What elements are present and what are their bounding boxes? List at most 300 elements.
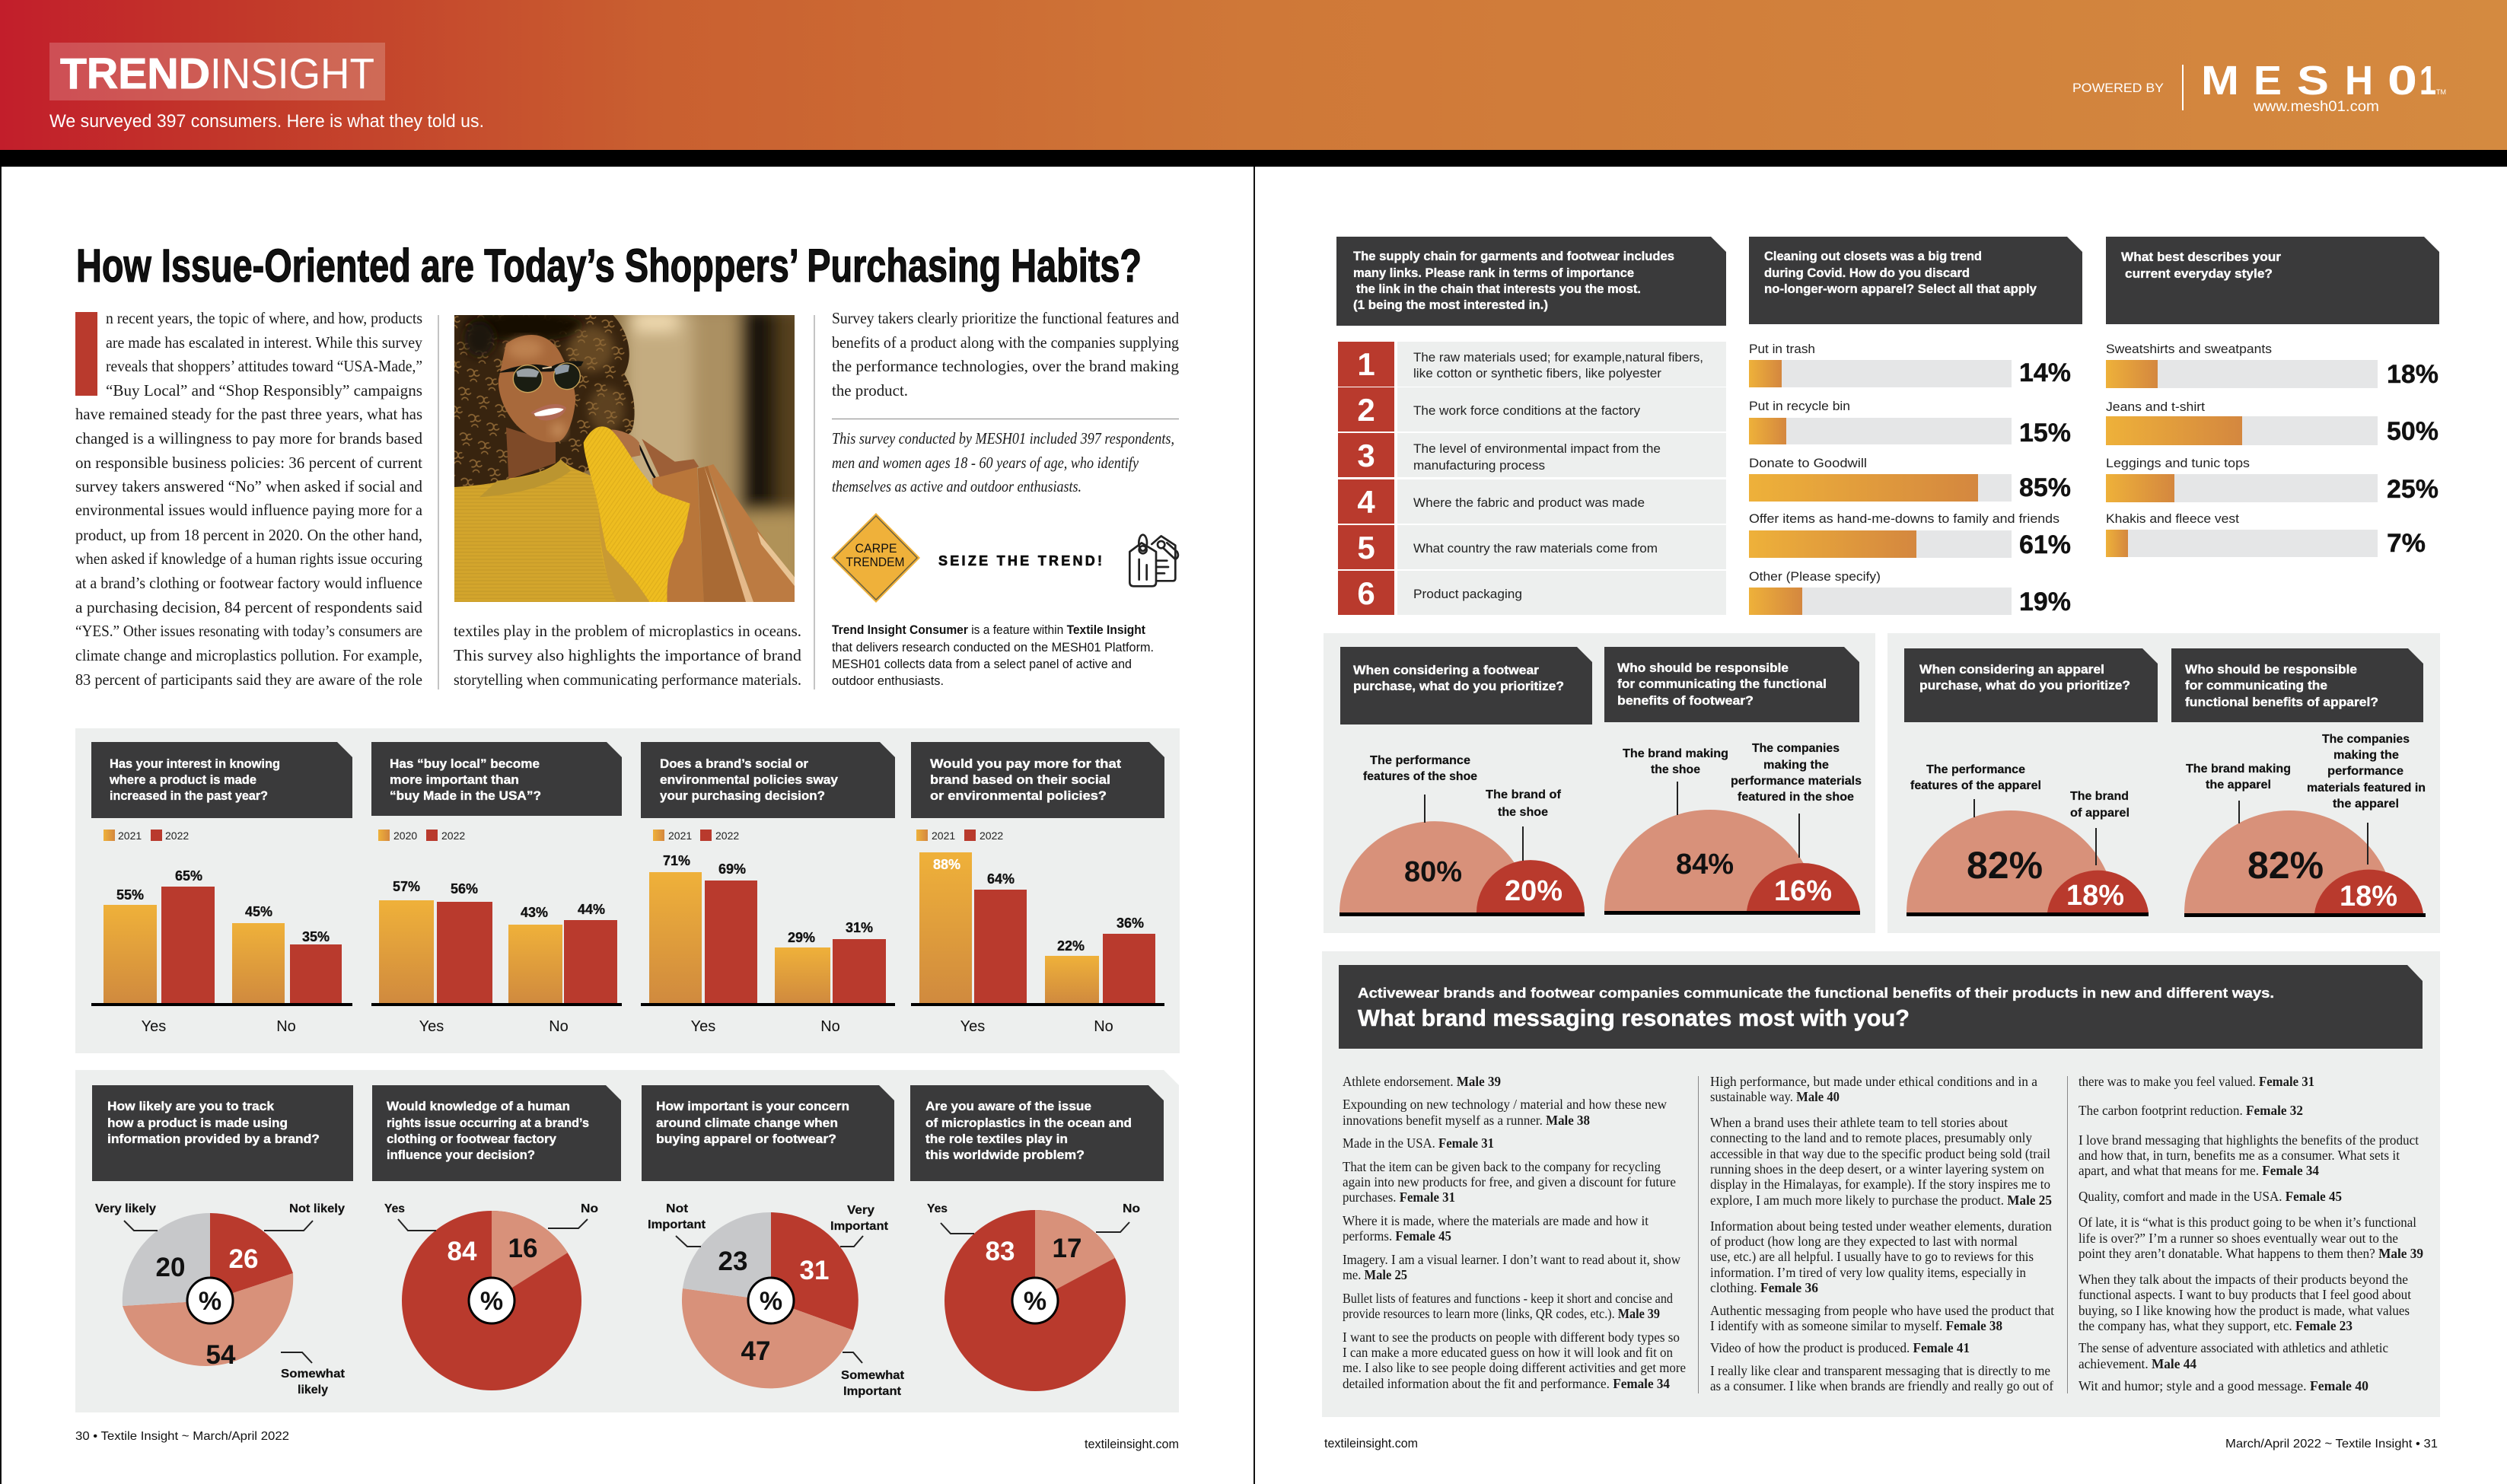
panel: supply chain ranking [1336, 237, 1726, 615]
chart: social or environmental policies: 29% [788, 930, 815, 945]
pie chart: human rights issue: influence your decision? [387, 1148, 535, 1162]
chart: social or environmental policies: 2021 [668, 830, 692, 842]
Trend Insight Consumer note: Trend Insight Consumer is a feature within Textile Insight [832, 623, 1145, 637]
chart: buy local: more important than [390, 772, 519, 787]
icon: Carpe Trendem road sign [831, 513, 920, 603]
comments column 1: innovations benefit myself as a runner. Male 38 [1343, 1113, 1590, 1128]
rank 4: Where the fabric and product was made [1413, 496, 1645, 510]
footer right: March/April 2022 ~ Textile Insight • 31 [2225, 1438, 2438, 1451]
chart: apparel purchase: purchase, what do you prioritize? [1919, 678, 2130, 693]
comments column 3: buying, so I like knowing how the product is made, what values [2079, 1303, 2410, 1318]
pie chart: microplastics awareness: % [1024, 1287, 1046, 1316]
article column 1: when asked if knowledge of a human rights issue occuring [75, 549, 422, 568]
chart: responsibility apparel: The companies [2322, 733, 2410, 746]
survey note [832, 429, 1174, 495]
chart: responsibility footwear: the shoe [1651, 763, 1700, 776]
comments column 1 [1343, 1074, 1686, 1391]
article column 2 continuation: storytelling when communicating performance materials. [454, 670, 801, 689]
article column 1: on responsible business policies: 36 percent of current [75, 454, 422, 472]
pie chart: microplastics awareness: 17 [1053, 1234, 1081, 1263]
messaging heading: Activewear brands and footwear companies communicate the functional benefits of their products in new and different ways. [1358, 986, 2274, 1001]
comments column 2: sustainable way. Male 40 [1710, 1089, 1840, 1104]
rank 5 [1338, 525, 1726, 569]
rank 4: 4 [1357, 484, 1375, 520]
panel: everyday style: 25% [2387, 475, 2439, 504]
comments column 1: again into new products for free, and given a discount for future [1343, 1174, 1676, 1189]
chart: interest in knowing where made: 45% [245, 904, 272, 919]
article column 3: the performance technologies, over the brand making [832, 357, 1180, 375]
chart: apparel purchase: When considering an apparel [1919, 662, 2104, 677]
rank 2: 2 [1357, 392, 1375, 428]
comments column 3: functional aspects. I want to buy products that I feel good about [2079, 1287, 2411, 1302]
panel: everyday style: 7% [2387, 529, 2426, 558]
comments column 2: as a consumer. I like when brands are friendly and really go out of [1710, 1378, 2053, 1393]
pie chart: climate change concern: Not [666, 1202, 688, 1215]
pie chart: track product: 20 [156, 1253, 185, 1282]
comments column 2: explore, I am much more likely to purchase the product. Male 25 [1710, 1193, 2052, 1208]
article column 3: the product. [832, 381, 908, 400]
article column 3: Survey takers clearly prioritize the functional features and [832, 309, 1179, 327]
pie chart: track product: 54 [206, 1340, 236, 1370]
chart: responsibility footwear: The brand making [1623, 747, 1728, 760]
comments column 3: The sense of adventure associated with athletics and athletic [2079, 1340, 2388, 1355]
rank 1: 1 [1357, 346, 1375, 382]
comments column 3: there was to make you feel valued. Female 31 [2079, 1074, 2314, 1089]
article column 1: climate change and microplastics pollution. For example, [75, 646, 422, 664]
comments column 3: The carbon footprint reduction. Female 32 [2079, 1103, 2303, 1118]
chart: apparel purchase: of apparel [2070, 807, 2130, 820]
chart: apparel purchase [1904, 648, 2158, 916]
chart: social or environmental policies [641, 742, 895, 1035]
chart: buy local: “buy Made in the USA”? [390, 788, 541, 803]
article column 1: 83 percent of participants said they are aware of the role [75, 670, 422, 689]
article column 2 continuation: This survey also highlights the importance of brand [454, 646, 802, 664]
article column 2 continuation [454, 622, 802, 689]
comments column 3: Wit and humor; style and a good message. Female 40 [2079, 1378, 2368, 1393]
panel: everyday style: Leggings and tunic tops [2106, 456, 2250, 470]
chart: pay more: or environmental policies? [930, 788, 1107, 803]
chart: apparel purchase: 82% [1967, 844, 2043, 887]
survey note: This survey conducted by MESH01 included 397 respondents, [832, 429, 1174, 447]
comments column 2 [1710, 1074, 2054, 1393]
chart: responsibility apparel: for communicating the [2185, 678, 2327, 693]
panel: footwear priorities [1324, 633, 1875, 933]
shopping bags [652, 467, 704, 602]
chart: responsibility apparel: Who should be responsible [2185, 662, 2357, 677]
messaging heading: What brand messaging resonates most with you? [1358, 1005, 1910, 1031]
comments column 3: life is over?” I’m a runner so shoes eventually wear out to the [2079, 1231, 2398, 1246]
chart: footwear purchase: 80% [1404, 856, 1462, 888]
article column 1: n recent years, the topic of where, and how, products [106, 309, 422, 327]
pie chart: track product: 26 [229, 1244, 258, 1274]
chart: interest in knowing where made: Yes [142, 1018, 166, 1035]
pie chart: track product: information provided by a brand? [107, 1132, 320, 1146]
pie chart: track product: % [199, 1287, 221, 1316]
panel: discarding apparel: Cleaning out closets was a big trend [1764, 249, 1982, 263]
survey note: men and women ages 18 - 60 years of age, who identify [832, 454, 1139, 472]
logo: Trend Insight: INSIGHT [210, 49, 374, 98]
hair [449, 308, 635, 489]
chart: interest in knowing where made: 2021 [118, 830, 142, 842]
panel: pie charts [75, 1070, 1179, 1412]
chart: buy local: 2022 [441, 830, 465, 842]
comments column 1: I want to see the products on people with different body types so [1343, 1330, 1680, 1345]
chart: buy local: 44% [578, 902, 605, 917]
rank 6: 6 [1357, 575, 1375, 611]
sweater [454, 459, 616, 602]
panel: supply chain ranking: the link in the chain that interests you the most. [1356, 282, 1641, 296]
comments column 2: I identify with as someone similar to myself. Female 38 [1710, 1318, 2002, 1333]
pie chart: climate change concern: How important is your concern [656, 1099, 849, 1113]
pie chart: climate change concern: Important [648, 1218, 706, 1231]
comments column 1: Athlete endorsement. Male 39 [1343, 1074, 1501, 1089]
comments column 1: purchases. Female 31 [1343, 1189, 1455, 1205]
Trend Insight Consumer note: outdoor enthusiasts. [832, 674, 944, 688]
comments column 3: When they talk about the impacts of their products beyond the [2079, 1272, 2408, 1287]
chart: responsibility apparel: functional benefits of apparel? [2185, 695, 2378, 709]
chart: buy local: 56% [451, 881, 478, 896]
comments column 1: Expounding on new technology / material and how these new [1343, 1097, 1667, 1112]
neck [506, 428, 556, 479]
chart: interest in knowing where made: Has your interest in knowing [110, 756, 280, 771]
pie chart: track product: Not likely [289, 1202, 345, 1215]
comments column 1: me. I also like to see people doing different activities and get more [1343, 1360, 1686, 1375]
seize the trend: SEIZE THE TREND! [938, 553, 1102, 568]
chart: social or environmental policies: No [820, 1018, 840, 1035]
chart: social or environmental policies: environmental policies sway [660, 772, 839, 787]
panel: discarding apparel: Other (Please specify) [1749, 569, 1881, 584]
pie chart: human rights issue: % [480, 1287, 503, 1316]
logo: Trend Insight [49, 43, 385, 100]
chart: footwear purchase: The performance [1370, 754, 1470, 767]
Trend Insight Consumer note [832, 623, 1154, 688]
pie chart: human rights issue [372, 1085, 621, 1390]
chart: pay more: 88% [933, 857, 960, 872]
chart: interest in knowing where made: No [276, 1018, 296, 1035]
footer left: 30 • Textile Insight ~ March/April 2022 [75, 1430, 289, 1443]
smile [530, 404, 566, 421]
chart: pay more [911, 742, 1164, 1035]
chart: pay more: No [1094, 1018, 1113, 1035]
footer right: textileinsight.com [1324, 1437, 1418, 1451]
rank 3 [1338, 433, 1726, 477]
panel: everyday style: What best describes your [2121, 250, 2281, 264]
panel: discarding apparel: Put in recycle bin [1749, 399, 1850, 413]
chart: responsibility apparel: performance [2327, 765, 2403, 778]
chart: social or environmental policies: Does a brand’s social or [660, 756, 808, 771]
comments column 3: point they aren’t donatable. What happens to them then? Male 39 [2079, 1246, 2423, 1261]
Trend Insight Consumer note: MESH01 collects data from a select panel of active and [832, 657, 1132, 671]
survey note: themselves as active and outdoor enthusiasts. [832, 477, 1081, 495]
sleeve [584, 426, 690, 602]
photo: woman with shopping bags [449, 308, 804, 613]
chart: responsibility footwear [1604, 647, 1862, 915]
panel: discarding apparel: Offer items as hand-me-downs to family and friends [1749, 511, 2059, 526]
chart: apparel purchase: The brand [2070, 790, 2129, 803]
chart: buy local: No [549, 1018, 569, 1035]
chart: responsibility apparel: The brand making [2186, 763, 2291, 775]
pie chart: human rights issue: rights issue occurring at a brand’s [387, 1116, 589, 1130]
logo: powered by MESH01: www.mesh01.com [2253, 99, 2379, 115]
pie chart: climate change concern: 23 [718, 1247, 747, 1276]
logo: powered by MESH01: 1 [2419, 58, 2436, 103]
chart: footwear purchase: the shoe [1498, 806, 1548, 819]
pie chart: climate change concern: Somewhat [841, 1369, 904, 1382]
logo: powered by MESH01: 0 [2388, 58, 2417, 103]
pie chart: climate change concern: Important [843, 1385, 901, 1398]
comments column 1: Made in the USA. Female 31 [1343, 1135, 1494, 1151]
pie chart: human rights issue: Yes [384, 1202, 405, 1215]
header subtitle: We surveyed 397 consumers. Here is what they told us. [49, 111, 484, 132]
chart: responsibility footwear: for communicating the functional [1617, 677, 1827, 691]
pie chart: climate change concern: buying apparel or footwear? [656, 1132, 836, 1146]
icon: Carpe Trendem road sign: TRENDEM [846, 556, 904, 569]
drop cap block [75, 312, 97, 396]
chart: footwear purchase: purchase, what do you prioritize? [1353, 679, 1564, 693]
chart: responsibility apparel: making the [2333, 749, 2399, 762]
chart: responsibility apparel: materials featured in [2307, 782, 2426, 795]
rank 4 [1338, 479, 1726, 524]
hand [611, 429, 641, 458]
logo: powered by MESH01: TM [2436, 88, 2446, 96]
pie chart: human rights issue: 16 [508, 1234, 537, 1263]
panel: everyday style [2106, 237, 2439, 558]
face [499, 335, 575, 442]
comments column 3: apart, and what that means for me. Female 34 [2079, 1163, 2319, 1178]
logo: Trend Insight: TREND [60, 49, 210, 98]
pie chart: climate change concern: around climate change when [656, 1116, 838, 1130]
comments column 3 [2079, 1074, 2423, 1393]
chart: apparel purchase: 18% [2066, 880, 2124, 912]
article column 1: environmental issues would influence paying more for a [75, 501, 423, 519]
panel: supply chain ranking: (1 being the most interested in.) [1353, 298, 1548, 312]
chart: pay more: 36% [1117, 916, 1144, 931]
comments column 1: Bullet lists of features and functions - keep it short and concise and [1343, 1291, 1673, 1306]
chart: buy local: 57% [393, 879, 420, 894]
chart: responsibility footwear: making the [1763, 759, 1829, 772]
chart: responsibility apparel [2171, 648, 2426, 917]
comments column 2: Video of how the product is produced. Female 41 [1710, 1340, 1970, 1355]
article column 3: benefits of a product along with the companies supplying [832, 333, 1179, 352]
pie chart: climate change concern [642, 1085, 904, 1398]
panel: everyday style: Jeans and t-shirt [2106, 400, 2205, 414]
rank 1 [1338, 342, 1726, 387]
article column 1: changed is a willingness to pay more for brands based [75, 429, 422, 447]
rank 6 [1338, 571, 1726, 615]
comments column 2: running shoes in the deep desert, or a winter layering system on [1710, 1161, 2044, 1177]
article column 1: “Buy Local” and “Shop Responsibly” campaigns [106, 381, 422, 400]
header banner [0, 0, 2507, 167]
chart: interest in knowing where made [91, 742, 352, 1035]
footer left [75, 1430, 1179, 1451]
rank 5: 5 [1357, 530, 1375, 565]
chart: responsibility apparel: 18% [2340, 881, 2397, 912]
icon: price tags [1129, 535, 1178, 586]
chart: pay more: 2022 [980, 830, 1003, 842]
article column 1: “YES.” Other issues resonating with today’s consumers are [75, 622, 422, 640]
chart: responsibility footwear: featured in the shoe [1738, 791, 1854, 804]
panel: everyday style: Sweatshirts and sweatpants [2106, 342, 2272, 356]
chart: apparel purchase: The performance [1926, 763, 2025, 776]
panel: discarding apparel [1749, 237, 2082, 616]
chart: apparel purchase: features of the apparel [1910, 779, 2041, 792]
panel: discarding apparel: 15% [2019, 419, 2071, 447]
chart: responsibility footwear: 16% [1774, 875, 1832, 907]
logo: powered by MESH01: H [2345, 58, 2373, 103]
pie chart: human rights issue: Would knowledge of a human [387, 1099, 570, 1113]
comments column 2: connecting to the land and to remote places, presumably only [1710, 1130, 2032, 1145]
panel: discarding apparel: Donate to Goodwill [1749, 456, 1867, 470]
panel: discarding apparel: during Covid. How do you discard [1764, 266, 1970, 280]
pie chart: microplastics awareness: of microplastics in the ocean and [925, 1116, 1132, 1130]
article column 1: at a brand’s clothing or footwear factory would influence [75, 574, 422, 592]
rank 1: like cotton or synthetic fibers, like polyester [1413, 367, 1662, 381]
chart: interest in knowing where made: 65% [175, 868, 202, 884]
chart: interest in knowing where made: 2022 [165, 830, 189, 842]
article title: How Issue-Oriented are Today’s Shoppers’ Purchasing Habits? [76, 240, 1142, 291]
article column 1: survey takers answered “No” when asked if social and [75, 477, 422, 495]
pie chart: track product: how a product is made using [107, 1116, 288, 1130]
comments column 1: me. Male 25 [1343, 1267, 1407, 1282]
pie chart: track product: Somewhat [281, 1368, 345, 1381]
pie chart: microplastics awareness: this worldwide problem? [925, 1148, 1085, 1162]
chart: footwear purchase: The brand of [1486, 788, 1562, 801]
comments column 2: Authentic messaging from people who have used the product that [1710, 1303, 2054, 1318]
chart: interest in knowing where made: 55% [116, 887, 144, 903]
panel: discarding apparel: 19% [2019, 588, 2071, 616]
chart: responsibility apparel: the apparel [2333, 798, 2399, 810]
logo: powered by MESH01 [2072, 58, 2446, 115]
panel: discarding apparel: no-longer-worn apparel? Select all that apply [1764, 282, 2037, 296]
comments column 3: Quality, comfort and made in the USA. Female 45 [2079, 1189, 2342, 1204]
chart: pay more: Would you pay more for that [930, 756, 1121, 771]
chart: social or environmental policies: 31% [846, 920, 873, 935]
rank 5: What country the raw materials come from [1413, 542, 1658, 556]
icon: Carpe Trendem road sign: CARPE [855, 542, 897, 556]
chart: pay more: Yes [960, 1018, 985, 1035]
panel: supply chain ranking: The supply chain for garments and footwear includes [1353, 249, 1674, 263]
logo: powered by MESH01: S [2297, 58, 2329, 103]
messaging heading [1339, 965, 2423, 1049]
chart: interest in knowing where made: increased in the past year? [110, 788, 268, 803]
chart: responsibility apparel: the apparel [2206, 779, 2271, 791]
pie chart: microplastics awareness [910, 1085, 1164, 1391]
comments column 1: I can make a more educated guess on how it will look and fit on [1343, 1345, 1673, 1360]
chart: buy local [371, 742, 622, 1035]
chart: social or environmental policies: Yes [691, 1018, 715, 1035]
chart: pay more: 64% [987, 871, 1015, 887]
logo: powered by MESH01: E [2254, 58, 2282, 103]
comments column 2: display in the Himalayas, for example). If the story inspires me to [1710, 1177, 2050, 1192]
comments column 1: Where it is made, where the materials are made and how it [1343, 1213, 1649, 1228]
comments column 3: I love brand messaging that highlights the benefits of the product [2079, 1132, 2419, 1148]
comments column 2: accessible in that way due to the specific product being sold (trail [1710, 1146, 2050, 1161]
comments column 2: of product (how long are they expected to last with normal [1710, 1234, 2018, 1249]
comments column 2: clothing. Female 36 [1710, 1280, 1818, 1295]
logo: powered by MESH01: POWERED BY [2072, 81, 2164, 95]
chart: footwear purchase: 20% [1505, 875, 1562, 907]
chart: responsibility footwear: The companies [1752, 742, 1840, 755]
pie chart: track product [92, 1085, 353, 1396]
rank 3: The level of environmental impact from the [1413, 442, 1661, 456]
rank 1: The raw materials used; for example,natural fibers, [1413, 351, 1703, 365]
panel: everyday style: current everyday style? [2125, 266, 2273, 281]
footer right [1324, 1437, 2438, 1451]
panel: apparel priorities [1887, 633, 2440, 933]
panel: discarding apparel: 14% [2019, 358, 2071, 387]
comments column 2: use, etc.) are all helpful. I usually have to go to reviews for this [1710, 1249, 2034, 1264]
pie chart: human rights issue: clothing or footwear factory [387, 1132, 557, 1146]
chart: interest in knowing where made: where a product is made [109, 772, 256, 787]
pie chart: track product: How likely are you to track [107, 1099, 275, 1113]
panel: everyday style: Khakis and fleece vest [2106, 511, 2239, 526]
chart: responsibility footwear: Who should be responsible [1617, 661, 1789, 675]
chart: footwear purchase: When considering a footwear [1353, 663, 1539, 677]
pie chart: human rights issue: 84 [448, 1237, 477, 1266]
sunglasses [497, 361, 584, 373]
chart: social or environmental policies: 2022 [715, 830, 739, 842]
footer left: textileinsight.com [1085, 1438, 1179, 1451]
article column 3 [832, 309, 1180, 400]
pie chart: microplastics awareness: 83 [986, 1237, 1015, 1266]
chart: responsibility footwear: benefits of footwear? [1617, 693, 1754, 708]
comments column 1: detailed information about the fit and performance. Female 34 [1343, 1376, 1670, 1391]
panel: everyday style: 50% [2387, 417, 2439, 446]
chart: pay more: 2021 [932, 830, 955, 842]
article column 1: product, up from 18 percent in 2020. On the other hand, [75, 526, 422, 544]
rank 3: manufacturing process [1413, 459, 1545, 473]
comments column 2: Information about being tested under weather elements, duration [1710, 1218, 2052, 1234]
comments column 2: When a brand uses their athlete team to tell stories about [1710, 1115, 2008, 1130]
article column 2 continuation: textiles play in the problem of microplastics in oceans. [454, 622, 801, 640]
chart: responsibility apparel: 82% [2247, 844, 2324, 887]
chart: social or environmental policies: your purchasing decision? [660, 788, 825, 803]
comments column 1: Imagery. I am a visual learner. I don’t want to read about it, show [1343, 1252, 1680, 1267]
comments column 1: That the item can be given back to the company for recycling [1343, 1159, 1661, 1174]
comments column 3: achievement. Male 44 [2079, 1356, 2196, 1371]
pie chart: track product: Very likely [95, 1202, 156, 1215]
pie chart: microplastics awareness: Yes [927, 1202, 948, 1215]
chart: social or environmental policies: 69% [718, 861, 746, 877]
article column 1: have remained steady for the past three years, what has [75, 405, 422, 423]
comments column 1: performs. Female 45 [1343, 1228, 1451, 1244]
chart: pay more: brand based on their social [930, 772, 1110, 787]
pie chart: climate change concern: % [760, 1287, 782, 1316]
pie chart: microplastics awareness: Are you aware of the issue [925, 1099, 1091, 1113]
article column 1 [75, 309, 423, 689]
panel: bar charts [75, 728, 1180, 1053]
logo: powered by MESH01: M [2201, 58, 2239, 103]
rank 2 [1338, 387, 1726, 432]
pie chart: climate change concern: 31 [800, 1256, 829, 1285]
chart: pay more: 22% [1057, 938, 1085, 954]
panel: supply chain ranking: many links. Please rank in terms of importance [1353, 266, 1634, 280]
comments column 3: the company has, what they support, etc. Female 23 [2079, 1318, 2353, 1333]
chart: buy local: Has “buy local” become [390, 756, 540, 771]
chart: footwear purchase [1340, 647, 1592, 916]
rank 6: Product packaging [1413, 588, 1522, 601]
pie chart: human rights issue: No [581, 1202, 598, 1215]
chart: buy local: 43% [521, 905, 548, 920]
pie chart: climate change concern: Important [830, 1220, 888, 1233]
chart: buy local: 2020 [393, 830, 417, 842]
pie chart: climate change concern: Very [847, 1204, 874, 1217]
comments column 1: provide resources to learn more (links, QR codes, etc.). Male 39 [1343, 1306, 1660, 1321]
panel: discarding apparel: 61% [2019, 530, 2071, 559]
pie chart: microplastics awareness: No [1123, 1202, 1140, 1215]
comments column 3: and how that, in turn, benefits me as a consumer. What sets it [2079, 1148, 2400, 1163]
article column 1: a purchasing decision, 84 percent of respondents said [75, 598, 423, 616]
